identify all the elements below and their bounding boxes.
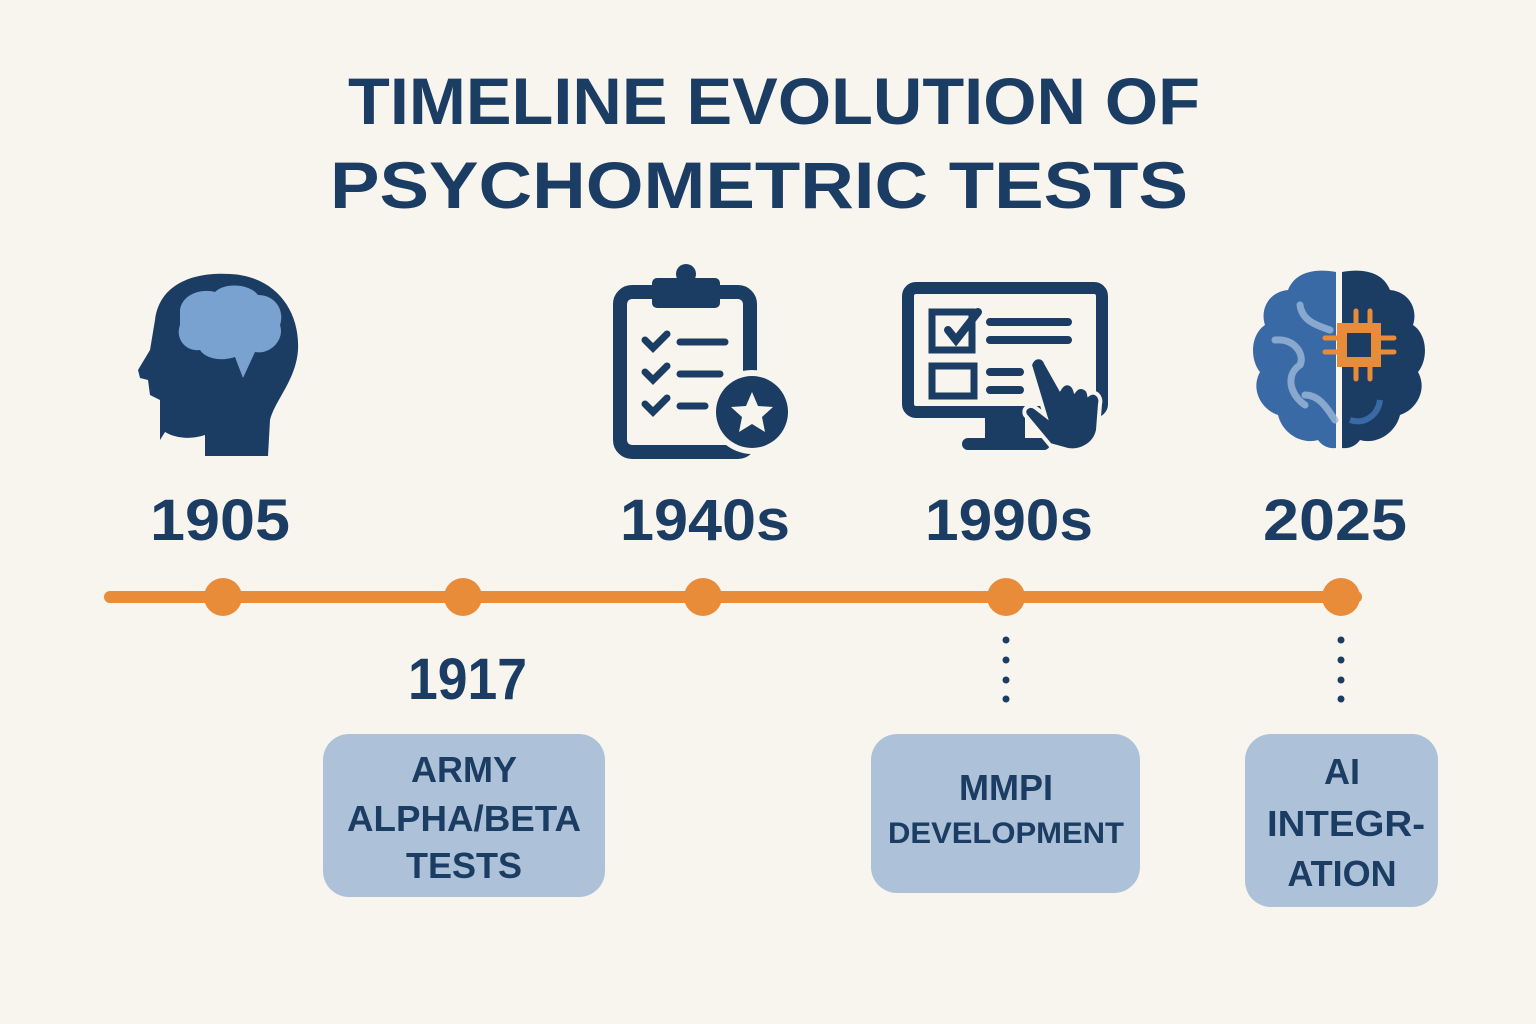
- box: army alpha/beta tests: [323, 734, 605, 897]
- box: ai integration: [1245, 734, 1438, 907]
- box: ai integration: AI: [1324, 751, 1360, 792]
- box: army alpha/beta tests: TESTS: [406, 845, 522, 886]
- year: 1905: 1905: [150, 488, 290, 553]
- icon: head with brain: [138, 274, 298, 456]
- box: mmpi development: [871, 734, 1140, 893]
- dotted connector 2025: [1338, 636, 1344, 702]
- box: mmpi development: MMPI: [959, 767, 1053, 808]
- box: army alpha/beta tests: ALPHA/BETA: [347, 798, 581, 839]
- icon: AI brain with chip: [1253, 271, 1425, 448]
- year: 1917: 1917: [408, 647, 527, 712]
- box: ai integration: INTEGR-: [1267, 803, 1425, 844]
- box: army alpha/beta tests: ARMY: [411, 749, 517, 790]
- year: 1940s: 1940s: [620, 488, 790, 553]
- timeline line with dots: [110, 578, 1360, 616]
- icon: computer with checklist and hand: [908, 288, 1102, 450]
- year: 2025: 2025: [1263, 488, 1407, 553]
- title: TIMELINE EVOLUTION OF: [348, 64, 1200, 138]
- icon: clipboard with star: [620, 264, 794, 454]
- title: [330, 64, 1200, 222]
- box: mmpi development: DEVELOPMENT: [888, 817, 1124, 850]
- dotted connector 1990s: [1002, 636, 1010, 702]
- year: 1990s: 1990s: [925, 488, 1093, 553]
- box: ai integration: ATION: [1287, 853, 1397, 894]
- title: PSYCHOMETRIC TESTS: [330, 148, 1188, 222]
